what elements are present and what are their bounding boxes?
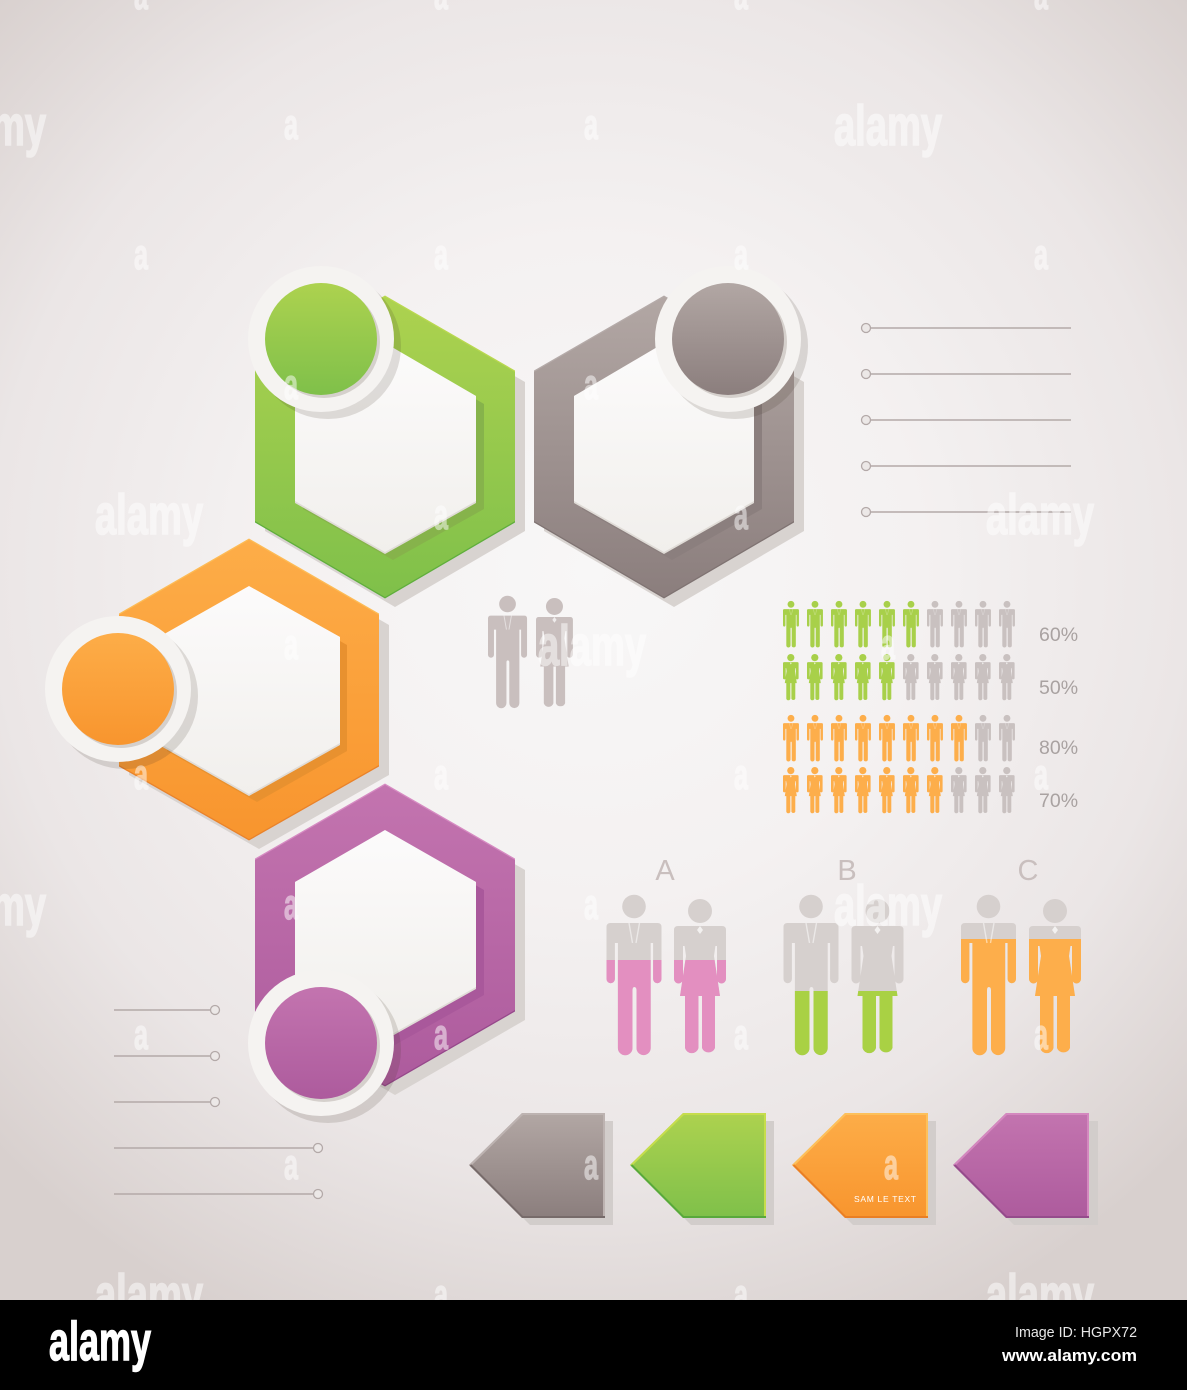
footer website: www.alamy.com xyxy=(1001,1346,1137,1365)
watermarks: a xyxy=(434,751,449,799)
group B figures xyxy=(784,855,904,1055)
watermarks: a xyxy=(734,491,749,539)
watermarks: a xyxy=(434,1011,449,1059)
leader lines: bottom left xyxy=(114,1006,322,1198)
watermarks: a xyxy=(1034,1011,1049,1059)
leader lines: top right xyxy=(862,324,1071,516)
badge: grey circle xyxy=(655,266,808,419)
watermarks: a xyxy=(734,231,749,279)
arrow tag: orange with sample text: SAM LE TEXT xyxy=(854,1194,916,1204)
badge: green circle xyxy=(248,266,401,419)
watermarks: a xyxy=(284,621,299,669)
watermarks: a xyxy=(434,491,449,539)
watermarks: a xyxy=(584,1141,599,1189)
pictogram row: 60%: 60% xyxy=(1039,624,1078,646)
watermarks: a xyxy=(884,1141,899,1189)
watermarks: a xyxy=(734,1011,749,1059)
watermarks: alamy xyxy=(834,874,942,938)
watermarks: a xyxy=(434,1271,449,1319)
watermarks: a xyxy=(434,231,449,279)
footer logo: alamy xyxy=(49,1310,151,1372)
watermarks: a xyxy=(284,101,299,149)
watermarks: a xyxy=(584,881,599,929)
watermarks: alamy xyxy=(95,1263,203,1327)
badge: orange circle xyxy=(45,616,198,769)
watermarks: a xyxy=(134,751,149,799)
footer image id: Image ID: HGPX72 xyxy=(1015,1324,1137,1341)
watermarks: a xyxy=(134,1011,149,1059)
group C figures xyxy=(961,855,1081,1055)
watermarks: alamy xyxy=(538,614,646,678)
hexagon: grey xyxy=(534,296,804,607)
watermarks: alamy xyxy=(986,1263,1094,1327)
pictogram row: 80% xyxy=(783,715,1078,761)
watermarks: a xyxy=(284,361,299,409)
pictogram row: 50%: 50% xyxy=(1039,677,1078,699)
arrow tag: green xyxy=(630,1113,774,1225)
watermarks: a xyxy=(881,621,896,669)
pictogram row: 60% xyxy=(783,601,1078,647)
watermarks: a xyxy=(1034,231,1049,279)
watermarks: alamy xyxy=(95,483,203,547)
pictogram row: 70% xyxy=(783,767,1078,813)
hexagon: green xyxy=(255,296,525,607)
watermarks: a xyxy=(584,361,599,409)
pictogram row: 50% xyxy=(783,654,1078,700)
group C figures: C xyxy=(1018,855,1038,887)
arrow tag: purple xyxy=(953,1113,1098,1225)
watermarks: a xyxy=(134,231,149,279)
footer bar xyxy=(0,1300,1187,1390)
watermarks: a xyxy=(284,1141,299,1189)
hexagon: orange xyxy=(119,538,389,849)
watermarks: a xyxy=(284,881,299,929)
badge: purple circle xyxy=(248,970,401,1123)
watermarks: a xyxy=(1034,751,1049,799)
watermarks: a xyxy=(584,101,599,149)
watermarks: alamy xyxy=(834,94,942,158)
pictogram row: 80%: 80% xyxy=(1039,737,1078,759)
group A figures: A xyxy=(655,855,675,887)
arrow tag: orange with sample text xyxy=(792,1113,936,1225)
pictogram row: 70%: 70% xyxy=(1039,790,1078,812)
watermarks: a xyxy=(734,1271,749,1319)
icon: man and woman pair xyxy=(488,596,573,708)
watermarks: alamy xyxy=(986,483,1094,547)
watermarks: a xyxy=(734,751,749,799)
hexagon: purple xyxy=(255,784,525,1095)
group A figures xyxy=(606,855,726,1055)
group B figures: B xyxy=(837,855,857,887)
arrow tag: grey xyxy=(469,1113,613,1225)
